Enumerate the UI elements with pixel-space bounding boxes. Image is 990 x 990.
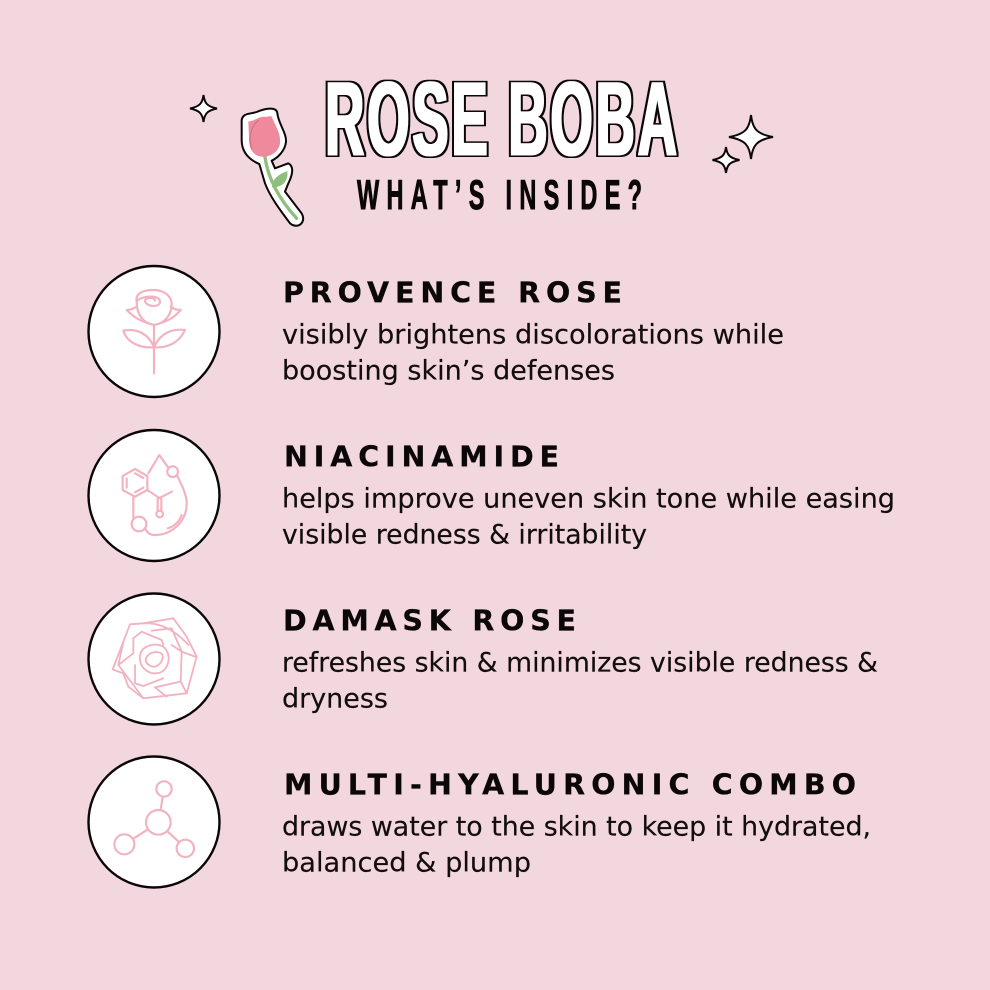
panel: multi-hyaluronic combo — [88, 756, 871, 888]
heading: DAMASK ROSE — [283, 604, 576, 638]
icon: rose with stem — [88, 266, 220, 397]
icon: sparkle small right — [712, 147, 740, 173]
icon: molecule drop — [88, 430, 220, 561]
heading: NIACINAMIDE — [284, 440, 559, 474]
description — [282, 320, 784, 386]
description: balanced & plump — [282, 848, 531, 878]
description: visible redness & irritability — [282, 520, 647, 550]
description: boosting skin’s defenses — [282, 356, 615, 386]
icon: sparkle left — [190, 95, 217, 122]
description: refreshes skin & minimizes visible redness & — [282, 648, 878, 678]
icon: rose sticker — [242, 109, 303, 226]
icon: three-node molecule — [88, 756, 220, 888]
heading: MULTI-HYALURONIC COMBO — [284, 768, 856, 802]
panel: niacinamide — [88, 430, 895, 561]
description — [282, 648, 878, 714]
title: ROSE BOBA — [325, 60, 677, 178]
panel: damask rose — [88, 594, 878, 724]
icon: rose bloom — [88, 594, 220, 724]
panel: provence rose — [88, 266, 784, 397]
subtitle: WHAT’S INSIDE? — [357, 172, 642, 219]
description: dryness — [282, 684, 388, 714]
description: draws water to the skin to keep it hydrated, — [282, 812, 871, 842]
description — [282, 812, 871, 878]
heading: PROVENCE ROSE — [283, 276, 622, 310]
description: visibly brightens discolorations while — [282, 320, 784, 350]
description — [282, 484, 895, 550]
description: helps improve uneven skin tone while easing — [282, 484, 895, 514]
icon: sparkle large right — [729, 115, 773, 159]
